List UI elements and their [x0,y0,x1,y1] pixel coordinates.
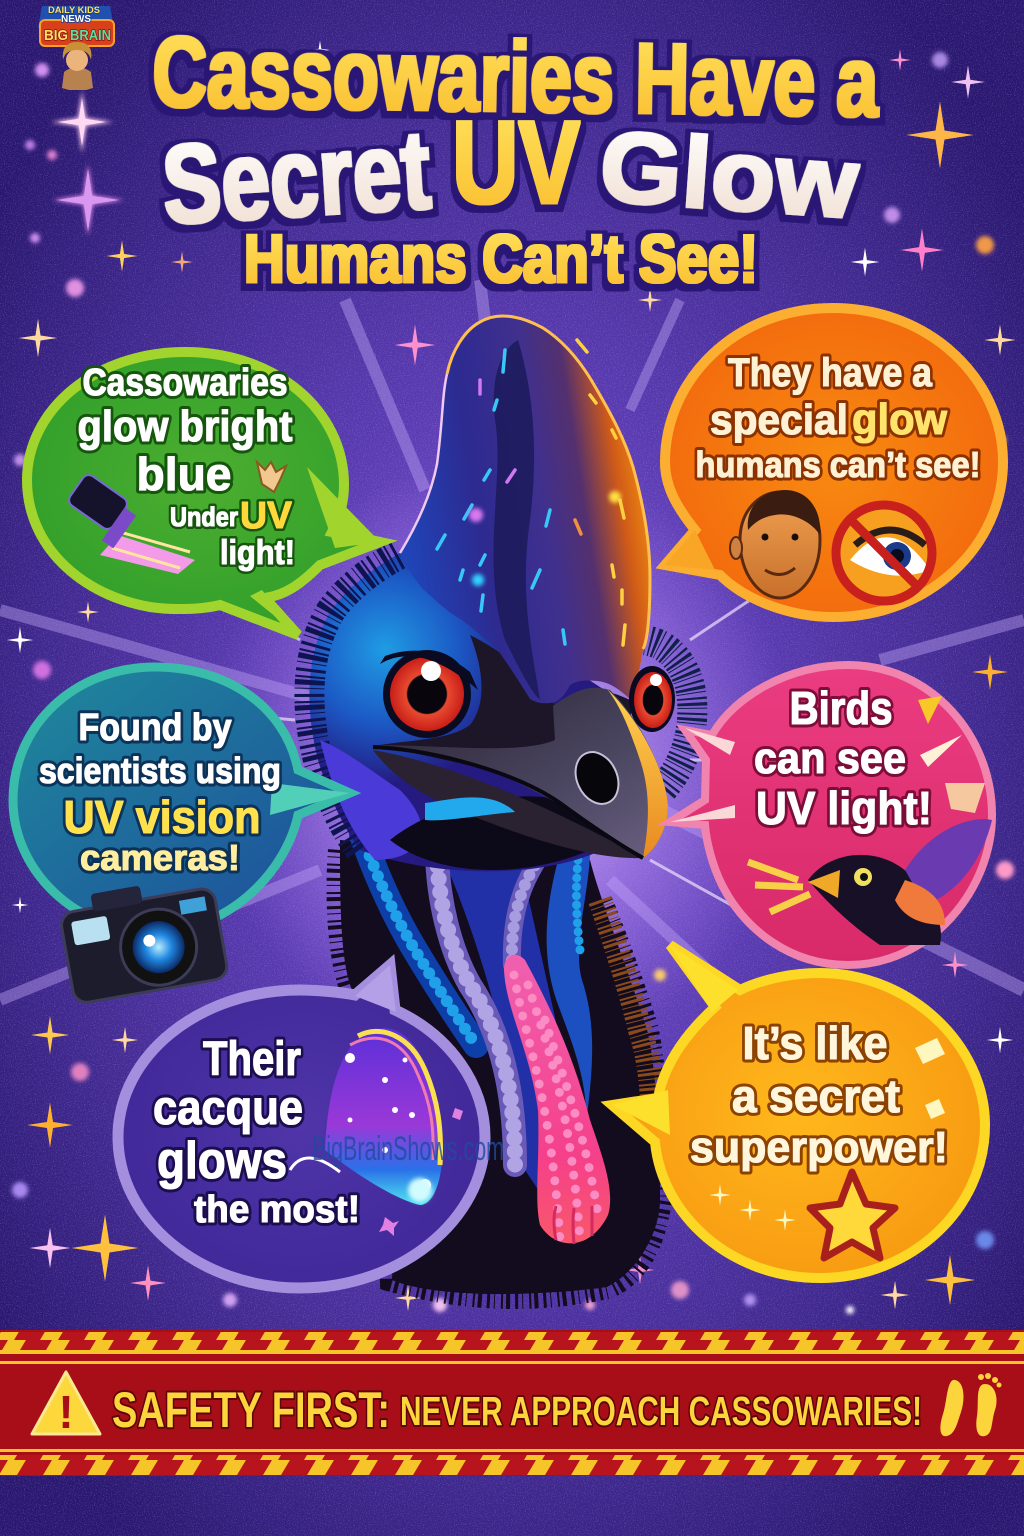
bubble: casque glows: the most! [194,1189,360,1231]
bubble: special glow: They have a [728,351,933,395]
icon: glowing casque [290,1028,463,1236]
safety banner [0,1330,1024,1476]
neck center [440,850,560,1200]
bubble: UV vision cameras: scientists using [39,750,281,791]
body feathers [338,840,660,1297]
bubble: glow bright blue: Under [170,502,238,532]
casque [400,316,650,703]
bubble: glow bright blue: light! [220,534,295,572]
bubble: special glow: special [710,396,848,443]
bubble: casque glows: glows [157,1132,287,1190]
logo: BIG [44,27,68,44]
head feather fringe [309,555,398,850]
icon: black bird [748,819,992,945]
bubble: birds see UV: can see [754,734,906,783]
purple cheek [320,740,422,860]
beak [375,688,668,858]
pink wattle [504,955,610,1244]
bubble: UV vision cameras: cameras! [80,837,240,878]
title [152,16,880,297]
lilac wattle left [437,853,515,1165]
icon: footprints [940,1373,1002,1436]
title: Glow [596,110,862,240]
icon: UV flashlight [66,472,195,574]
bubble: glow bright blue: UV [240,495,293,537]
bubble: glow bright blue: Cassowaries [82,362,288,404]
bubble: secret superpower: a secret [732,1070,900,1122]
rays of light around head [220,590,760,910]
bubble: secret superpower: It’s like [742,1017,888,1069]
icon: camera [57,873,229,1004]
bubble: UV vision cameras: Found by [78,707,232,749]
central crease [493,340,540,700]
bubble: UV vision cameras [13,667,350,1004]
logo: NEWS [61,14,91,25]
icon: warning triangle [32,1372,100,1438]
left blue wattle [362,835,580,1045]
mascot [62,42,93,90]
watermark: BigBrainShows.com [312,1130,504,1168]
lower beak [373,750,643,858]
bubble: casque glows: cacque [153,1082,303,1135]
cassowary [200,316,800,1297]
right eye [629,666,675,732]
bubble: birds see UV: UV light! [756,782,932,834]
nostril [567,745,627,811]
right head feathers [640,640,692,790]
icon: star [810,1172,895,1258]
banner text: SAFETY FIRST: [112,1382,390,1438]
icon: boy face [730,490,820,598]
bubble: glow bright blue: glow bright [78,402,293,451]
title: Secret [159,107,434,248]
blue throat patch [425,797,515,820]
icon: crossed-out eye [834,503,934,603]
bubble: birds see UV: Birds [790,682,892,734]
bubble: glow bright blue: blue [136,448,232,500]
bubble: glow bright blue [27,352,380,635]
bubble: birds see UV [670,665,992,965]
bubble: special glow: glow [852,395,948,444]
head base [309,553,620,871]
bubble: secret superpower [612,945,985,1278]
bubble: casque glows [118,965,485,1288]
bubble: secret superpower: superpower! [690,1123,948,1172]
left eye [380,650,478,738]
logo: DAILY KIDS [48,5,100,15]
mouth line [373,747,643,858]
logo: BRAIN [70,27,111,44]
icon: warning triangle: ! [58,1386,74,1438]
bubble: UV vision cameras: UV vision [64,791,260,843]
bubble: casque glows: Their [203,1033,301,1086]
face dark [380,635,632,790]
bubble: special glow [665,308,1003,617]
lilac wattle right [512,838,553,965]
black throat [390,796,620,870]
icon: sparkle hand [257,462,286,492]
title: UV [452,97,580,229]
bubble: special glow: humans can’t see! [696,444,980,485]
right blue patch [547,850,592,1130]
logo [38,5,114,90]
accents [918,696,942,724]
title: Humans Can’t See! [244,221,758,297]
